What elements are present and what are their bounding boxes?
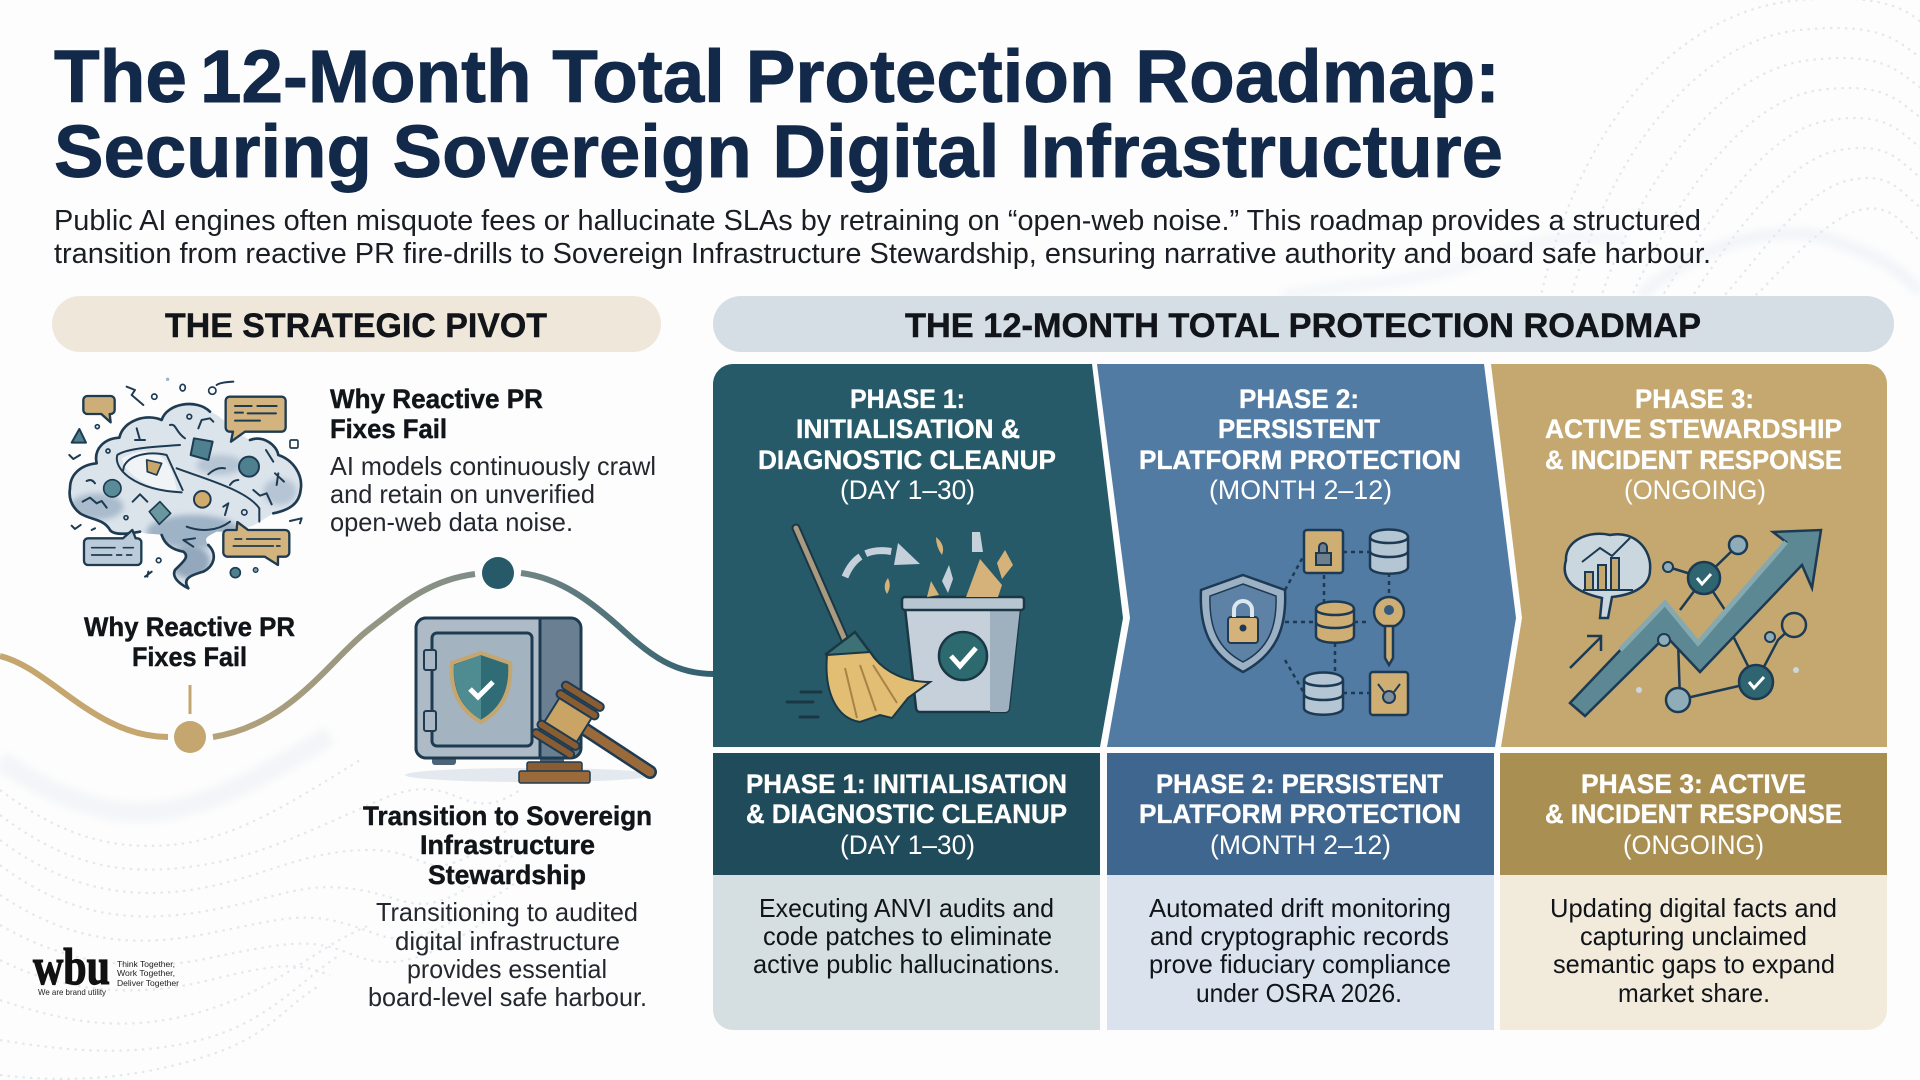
label: why reactive PR fixes fail, centre xyxy=(84,612,295,672)
panel: phase 2 top xyxy=(1097,364,1516,747)
text: why reactive PR fixes fail, right: and retain on unverified xyxy=(330,479,595,509)
phase 2 card body: and cryptographic records xyxy=(1150,921,1449,951)
phase 1 heading: (DAY 1–30) xyxy=(840,475,975,505)
speech bubble, blue xyxy=(84,530,141,565)
icon: growth arrow and network xyxy=(1565,530,1821,716)
speech bubble, gold bottom xyxy=(223,522,289,565)
phase 1 heading: PHASE 1: xyxy=(850,384,965,414)
text: why reactive PR fixes fail, right: Why Reactive PR xyxy=(330,384,543,414)
phase 1 heading: INITIALISATION & xyxy=(796,414,1020,444)
label: why reactive PR fixes fail, centre: Fixes Fail xyxy=(132,642,247,672)
phase 3 card body: capturing unclaimed xyxy=(1580,921,1807,951)
label: why reactive PR fixes fail, centre: Why Reactive PR xyxy=(84,612,295,642)
phase 3 card body xyxy=(1550,893,1837,1008)
shield on safe xyxy=(452,653,510,722)
phase 2 card body: Automated drift monitoring xyxy=(1149,893,1451,923)
phase 3 heading: PHASE 3: xyxy=(1635,384,1754,414)
phase 2 heading: PERSISTENT xyxy=(1218,414,1380,444)
text: transition to sovereign infrastructure stewardship: Transition to Sovereign xyxy=(363,801,652,831)
phase 1 card heading xyxy=(746,769,1067,860)
phase 2 card heading: (MONTH 2–12) xyxy=(1210,830,1391,860)
curve: pivot path xyxy=(0,557,714,753)
card: phase 2 detail xyxy=(1107,753,1494,1030)
phase 3 card heading xyxy=(1545,769,1842,860)
phase 3 card body: semantic gaps to expand xyxy=(1553,949,1835,979)
phase 2 card heading: PHASE 2: PERSISTENT xyxy=(1156,769,1443,799)
phase 2 card body: prove fiduciary compliance xyxy=(1149,949,1451,979)
phase 3 card body: Updating digital facts and xyxy=(1550,893,1837,923)
subtitle: Public AI engines often misquote fees or hallucinate SLAs by retraining on “open-web noise.” This roadmap provides a structured xyxy=(54,205,1701,237)
speech bubble, gold top right xyxy=(226,397,286,442)
phase 1 card heading: PHASE 1: INITIALISATION xyxy=(746,769,1067,799)
phase 1 card body xyxy=(753,893,1060,979)
card: phase 1 detail xyxy=(713,753,1100,1030)
title: 12-Month Total Protection Roadmap: xyxy=(200,35,1500,118)
phase 2 card body xyxy=(1149,893,1451,1008)
phase 2 heading: PLATFORM PROTECTION xyxy=(1139,445,1461,475)
title: The xyxy=(54,35,187,118)
phase 3 card heading: (ONGOING) xyxy=(1623,830,1764,860)
phase 1 heading: DIAGNOSTIC CLEANUP xyxy=(758,445,1056,475)
phase 1 card body: code patches to eliminate xyxy=(763,921,1052,951)
gavel xyxy=(519,680,650,783)
phase 1 card body: Executing ANVI audits and xyxy=(759,893,1054,923)
heading: roadmap: THE 12-MONTH TOTAL PROTECTION ROADMAP xyxy=(905,307,1701,345)
logo: We are brand utility xyxy=(38,987,107,997)
heading: the strategic pivot xyxy=(52,296,661,352)
phase 3 heading: ACTIVE STEWARDSHIP xyxy=(1545,414,1842,444)
icon: broom and bin xyxy=(787,528,1024,722)
subtitle xyxy=(54,205,1711,270)
title: Securing Sovereign Digital Infrastructure xyxy=(54,110,1503,193)
logo xyxy=(33,939,179,997)
text: transition to sovereign infrastructure stewardship: board-level safe harbour. xyxy=(368,982,647,1012)
phase 3 card heading: & INCIDENT RESPONSE xyxy=(1545,799,1842,829)
phase 3 heading xyxy=(1545,384,1842,505)
logo: Work Together, xyxy=(117,968,175,978)
phase 2 card body: under OSRA 2026. xyxy=(1196,978,1402,1008)
panel: phase 1 top xyxy=(713,364,1123,747)
phase 3 card body: market share. xyxy=(1618,978,1770,1008)
phase 3 heading: (ONGOING) xyxy=(1624,475,1766,505)
logo: Deliver Together xyxy=(117,978,179,988)
heading: roadmap xyxy=(713,296,1894,352)
phase 2 card heading xyxy=(1139,769,1461,860)
heading: the strategic pivot: THE STRATEGIC PIVOT xyxy=(165,307,547,345)
subtitle: transition from reactive PR fire-drills to Sovereign Infrastructure Stewardship, ensuring narrative authority and board safe harbour. xyxy=(54,238,1711,270)
text: why reactive PR fixes fail, right xyxy=(330,384,656,537)
phase 1 heading xyxy=(758,384,1056,505)
panel: phase 3 top xyxy=(1491,364,1887,747)
phase 1 card body: active public hallucinations. xyxy=(753,949,1060,979)
phase 1 card heading: (DAY 1–30) xyxy=(840,830,975,860)
title xyxy=(54,35,1503,193)
logo: Think Together, xyxy=(117,959,175,969)
text: why reactive PR fixes fail, right: AI models continuously crawl xyxy=(330,451,656,481)
text: transition to sovereign infrastructure stewardship: digital infrastructure xyxy=(395,926,620,956)
text: transition to sovereign infrastructure stewardship xyxy=(363,801,652,1012)
text: why reactive PR fixes fail, right: open-web data noise. xyxy=(330,507,573,537)
phase 3 heading: & INCIDENT RESPONSE xyxy=(1545,445,1842,475)
text: transition to sovereign infrastructure stewardship: Stewardship xyxy=(428,860,586,890)
phase 3 card heading: PHASE 3: ACTIVE xyxy=(1581,769,1806,799)
logo: wbu xyxy=(33,939,110,996)
icon: protected network xyxy=(1201,530,1408,715)
text: transition to sovereign infrastructure stewardship: Transitioning to audited xyxy=(376,897,638,927)
icon: noisy brain cloud xyxy=(69,378,302,588)
phase 2 heading xyxy=(1139,384,1461,505)
icon: safe and gavel xyxy=(405,618,655,783)
text: transition to sovereign infrastructure stewardship: Infrastructure xyxy=(420,830,595,860)
phase 2 heading: PHASE 2: xyxy=(1239,384,1359,414)
phase 1 card heading: & DIAGNOSTIC CLEANUP xyxy=(746,799,1067,829)
text: transition to sovereign infrastructure stewardship: provides essential xyxy=(407,954,607,984)
text: why reactive PR fixes fail, right: Fixes Fail xyxy=(330,414,447,444)
phase 2 heading: (MONTH 2–12) xyxy=(1209,475,1392,505)
phase 2 card heading: PLATFORM PROTECTION xyxy=(1139,799,1461,829)
card: phase 3 detail xyxy=(1500,753,1887,1030)
speech bubble, gold small xyxy=(83,396,115,422)
